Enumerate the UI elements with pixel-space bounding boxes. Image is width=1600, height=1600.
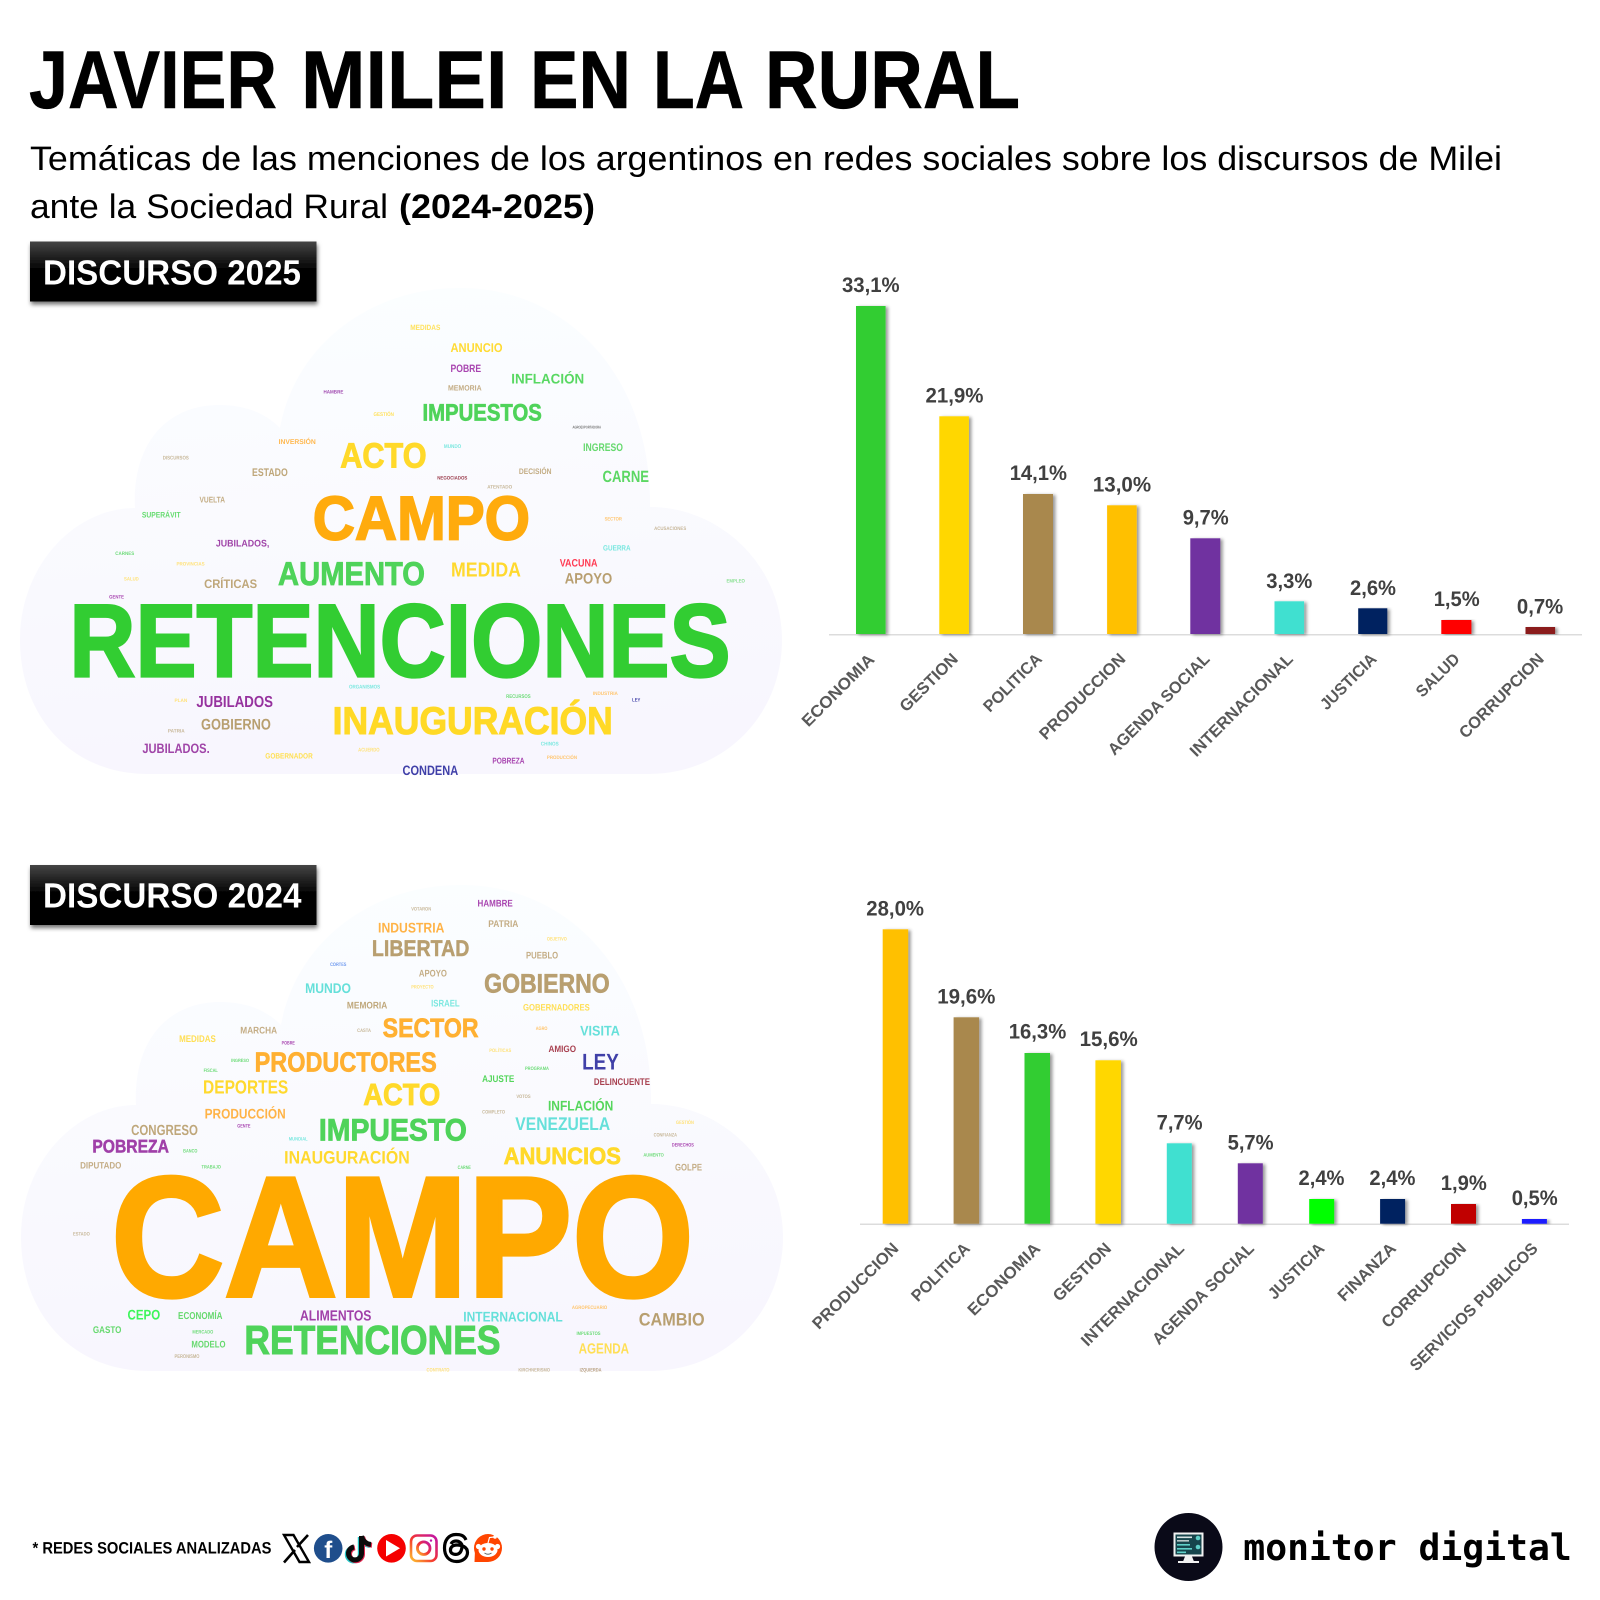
panel: word cloud 2025: JUBILADOS,	[216, 538, 269, 549]
title: RURAL	[765, 35, 1020, 126]
panel: word cloud 2024: KIRCHNERISMO	[518, 1367, 550, 1373]
panel: word cloud 2024: PERONISMO	[174, 1354, 199, 1359]
panel: word cloud 2025: MUNDO	[444, 444, 461, 449]
panel: word cloud 2025: GENTE	[109, 594, 124, 600]
panel: word cloud 2025: DECISIÓN	[519, 467, 552, 476]
bar: FINANZA 2,4%: FINANZA	[1334, 1240, 1400, 1305]
bar: SERVICIOS PUBLICOS 0,5%: 0,5%	[1512, 1187, 1558, 1210]
panel: word cloud 2024: COMPLETO	[482, 1109, 505, 1115]
bar: PRODUCCION 13,0%	[1036, 473, 1151, 743]
panel: word cloud 2025: CONDENA	[403, 763, 458, 778]
panel: word cloud 2025: VACUNA	[560, 557, 597, 569]
bar: PRODUCCION 28,0%: 28,0%	[866, 897, 924, 920]
panel: word cloud 2024: POBRE	[282, 1040, 295, 1046]
logo: monitor digital	[1154, 1513, 1572, 1581]
bar chart: temáticas 2024	[809, 897, 1569, 1375]
icon: monitor	[1154, 1513, 1222, 1581]
panel: word cloud 2025: INDUSTRIA	[593, 691, 618, 696]
panel: word cloud 2024: ACTO	[363, 1078, 440, 1112]
panel: word cloud 2024: GASTO	[93, 1325, 121, 1335]
bar: ECONOMIA 33,1%: ECONOMIA	[798, 651, 878, 731]
panel: word cloud 2025: CRÍTICAS	[204, 577, 257, 591]
icon: Facebook: f	[324, 1537, 333, 1564]
icon: X	[284, 1535, 309, 1562]
icon row: social networks	[284, 1534, 502, 1564]
bar: ECONOMIA 33,1%: 33,1%	[842, 274, 900, 297]
panel: word cloud 2025: GESTIÓN	[373, 411, 394, 417]
bar: PRODUCCION 28,0%	[809, 897, 924, 1333]
panel: word cloud 2025: NEGOCIADOS	[437, 475, 467, 481]
bar: POLITICA 19,6%: POLITICA	[908, 1240, 974, 1305]
panel: word cloud 2024: DEPORTES	[203, 1076, 288, 1098]
panel: word cloud 2024: HAMBRE	[478, 898, 513, 909]
panel: word cloud 2025: SECTOR	[605, 516, 622, 522]
panel: word cloud 2025: HAMBRE	[323, 389, 343, 395]
bar: AGENDA SOCIAL 9,7%: AGENDA SOCIAL	[1105, 650, 1214, 759]
panel: word cloud 2024: POBREZA	[92, 1136, 169, 1157]
panel: word cloud 2025: AUMENTO	[278, 555, 425, 592]
badge: discurso 2024: DISCURSO 2024	[43, 877, 302, 916]
bar: GESTION 15,6%: 15,6%	[1080, 1028, 1138, 1051]
logo: monitor digital: monitor digital	[1243, 1526, 1572, 1569]
panel: word cloud 2024: VENEZUELA	[515, 1113, 610, 1134]
word: CAMPO: CAMPO	[111, 1141, 694, 1332]
bar: INTERNACIONAL 3,3%: 3,3%	[1266, 570, 1313, 593]
panel: word cloud 2024: GENTE	[237, 1123, 251, 1129]
panel: word cloud 2025: PROVINCIAS	[177, 561, 205, 567]
panel: word cloud 2024: CORTES	[330, 962, 346, 967]
panel: word cloud 2025: INFLACIÓN	[511, 371, 584, 387]
bar: AGENDA SOCIAL 9,7%: 9,7%	[1183, 507, 1229, 530]
panel: word cloud 2024: INGRESO	[231, 1058, 249, 1063]
panel: word cloud 2024: VOTARON	[411, 906, 431, 912]
panel: word cloud 2024	[21, 885, 783, 1373]
bar: POLITICA 14,1%: POLITICA	[980, 650, 1046, 716]
panel: word cloud 2025: MEDIDA	[451, 558, 521, 581]
badge: discurso 2025	[30, 242, 316, 302]
panel: word cloud 2025: JUBILADOS	[196, 693, 273, 711]
bar chart: temáticas 2025	[798, 274, 1582, 760]
panel: word cloud 2024: ECONOMÍA	[178, 1310, 222, 1321]
panel: word cloud 2024: CEPO	[128, 1307, 160, 1322]
bar: AGENDA SOCIAL 5,7%: AGENDA SOCIAL	[1149, 1240, 1258, 1348]
panel: word cloud 2024: ALIMENTOS	[300, 1308, 371, 1324]
panel: word cloud 2024: MEDIDAS	[179, 1034, 216, 1044]
bar: PRODUCCION 28,0%: PRODUCCION	[809, 1240, 902, 1333]
bar: INTERNACIONAL 7,7%: INTERNACIONAL	[1078, 1240, 1188, 1350]
bar: INTERNACIONAL 3,3%: INTERNACIONAL	[1186, 650, 1297, 760]
panel: word cloud 2024: TRABAJO	[202, 1164, 221, 1170]
bar: FINANZA 2,4%	[1334, 1167, 1416, 1305]
panel: word cloud 2025: ANUNCIO	[451, 341, 503, 355]
subtitle	[30, 140, 1502, 226]
panel: word cloud 2025: INVERSIÓN	[279, 438, 316, 446]
title: MILEI	[301, 35, 508, 126]
bar: JUSTICIA 2,4%: 2,4%	[1298, 1167, 1345, 1190]
bar: SALUD 1,5%: SALUD	[1413, 650, 1464, 701]
bar: JUSTICIA 2,4%	[1265, 1167, 1345, 1303]
panel: word cloud 2024: PUEBLO	[526, 950, 558, 961]
panel: word cloud 2024: LIBERTAD	[372, 936, 469, 961]
panel: word cloud 2024: AGROPECUARIO	[572, 1305, 607, 1310]
icon: TikTok	[347, 1536, 372, 1561]
panel: word cloud 2024: MEMORIA	[347, 1000, 387, 1011]
bar: ECONOMIA 33,1%	[798, 274, 900, 731]
subtitle: ante la Sociedad Rural	[30, 188, 388, 226]
panel: word cloud 2024: DELINCUENTE	[594, 1077, 650, 1087]
panel: word cloud 2024: POLÍTICAS	[489, 1047, 511, 1053]
panel: word cloud 2025: MEDIDAS	[410, 323, 440, 332]
bar: CORRUPCION 1,9%	[1378, 1172, 1487, 1332]
panel: word cloud 2024: VOTOS	[516, 1094, 531, 1099]
icon: Reddit	[474, 1534, 502, 1562]
icon: YouTube	[377, 1534, 406, 1563]
panel: word cloud 2024: LEY	[582, 1049, 619, 1075]
panel: word cloud 2024: MERCADO	[192, 1329, 213, 1335]
panel: word cloud 2025: CARNE	[603, 468, 649, 486]
footer note: redes sociales: * REDES SOCIALES ANALIZADAS	[32, 1540, 272, 1558]
panel: word cloud 2024: AMIGO	[548, 1044, 576, 1054]
panel: word cloud 2024: APOYO	[419, 968, 447, 979]
panel: word cloud 2025: CHINOS	[541, 741, 559, 747]
panel: word cloud 2025: GUERRA	[603, 543, 631, 552]
bar: ECONOMIA 16,3%	[964, 1021, 1067, 1320]
panel: word cloud 2025: ACUSACIONES	[654, 526, 686, 531]
panel: word cloud 2025: SALUD	[124, 576, 139, 582]
panel: word cloud 2025: ESTADO	[252, 466, 288, 478]
panel: word cloud 2025: JUBILADOS.	[142, 741, 210, 756]
panel: word cloud 2025: AGROEXPORTADORA	[572, 425, 601, 429]
bar: SALUD 1,5%	[1413, 588, 1480, 701]
panel: word cloud 2024: CAMBIO	[639, 1309, 705, 1329]
panel: word cloud 2025: PLAN	[174, 698, 187, 703]
bar: AGENDA SOCIAL 5,7%: 5,7%	[1228, 1131, 1274, 1154]
panel: word cloud 2025: ORGANISMOS	[349, 684, 380, 690]
word: RETENCIONES: RETENCIONES	[69, 583, 731, 699]
panel: word cloud 2024: PROGRAMA	[525, 1066, 549, 1071]
panel: word cloud 2025: ATENTADO	[487, 484, 512, 490]
panel: word cloud 2025: POBRE	[451, 362, 481, 374]
panel: word cloud 2024: ESTADO	[73, 1231, 90, 1237]
bar: AGENDA SOCIAL 9,7%	[1105, 507, 1229, 759]
panel: word cloud 2025: ACUERDO	[358, 747, 380, 753]
panel: word cloud 2024: GESTIÓN	[676, 1119, 694, 1125]
bar: FINANZA 2,4%: 2,4%	[1369, 1167, 1416, 1190]
bar: CORRUPCION 0,7%	[1456, 595, 1564, 742]
bar: POLITICA 14,1%	[980, 462, 1067, 716]
subtitle: Temáticas de las menciones de los argentinos en redes sociales sobre los discursos de Milei	[30, 140, 1502, 178]
panel: word cloud 2025: MEMORIA	[448, 384, 482, 392]
panel: word cloud 2024: AUMENTO	[643, 1152, 664, 1158]
subtitle: (2024-2025)	[399, 188, 595, 226]
panel: word cloud 2025: ACTO	[340, 436, 427, 475]
bar: SALUD 1,5%: 1,5%	[1434, 588, 1480, 611]
bar: CORRUPCION 1,9%: CORRUPCION	[1378, 1240, 1470, 1332]
panel: word cloud 2025: INGRESO	[583, 441, 623, 453]
bar: JUSTICIA 2,6%: JUSTICIA	[1317, 650, 1380, 714]
bar: GESTION 21,9%: GESTION	[896, 650, 962, 716]
bar: GESTION 15,6%: GESTION	[1050, 1240, 1115, 1305]
bar: GESTION 21,9%	[896, 385, 984, 716]
panel: word cloud 2024: CONFIANZA	[654, 1132, 677, 1138]
bar: SERVICIOS PUBLICOS 0,5%	[1407, 1187, 1558, 1375]
bar: JUSTICIA 2,6%	[1317, 577, 1396, 714]
panel: word cloud 2025: PATRIA	[168, 728, 185, 734]
word: INAUGURACIÓN: INAUGURACIÓN	[333, 699, 613, 742]
panel: word cloud 2024: BANCO	[183, 1148, 198, 1154]
panel: word cloud 2025: PRODUCCIÓN	[547, 754, 577, 760]
panel: word cloud 2024: CONGRESO	[131, 1122, 198, 1138]
panel: word cloud 2024: ISRAEL	[431, 998, 460, 1009]
panel: word cloud 2025: APOYO	[565, 570, 612, 587]
panel: word cloud 2024: INDUSTRIA	[378, 920, 444, 935]
panel: word cloud 2024: GOBERNADORES	[523, 1002, 590, 1012]
panel: word cloud 2024: IMPUESTO	[319, 1113, 467, 1147]
bar: ECONOMIA 16,3%: ECONOMIA	[964, 1240, 1044, 1320]
panel: word cloud 2025: GOBERNADOR	[265, 752, 313, 760]
bar: AGENDA SOCIAL 5,7%	[1149, 1131, 1274, 1348]
panel: word cloud 2024: INTERNACIONAL	[463, 1309, 563, 1324]
panel: word cloud 2024: MUNDO	[305, 980, 351, 996]
bar: PRODUCCION 13,0%: PRODUCCION	[1036, 650, 1129, 743]
bar: JUSTICIA 2,6%: 2,6%	[1350, 577, 1396, 600]
bar: INTERNACIONAL 3,3%	[1186, 570, 1313, 760]
bar: CORRUPCION 1,9%: 1,9%	[1441, 1172, 1487, 1195]
panel: word cloud 2024: ANUNCIOS	[504, 1143, 621, 1169]
badge: discurso 2025: DISCURSO 2025	[43, 254, 301, 292]
panel: word cloud 2025: VUELTA	[199, 495, 225, 505]
bar: JUSTICIA 2,4%: JUSTICIA	[1265, 1240, 1328, 1303]
panel: word cloud 2025: LEY	[632, 697, 640, 703]
panel: word cloud 2025: RECURSOS	[506, 694, 531, 699]
panel: word cloud 2024: PATRIA	[488, 919, 518, 929]
panel: word cloud 2024: IMPUESTOS	[577, 1331, 601, 1336]
panel: word cloud 2024: GOBIERNO	[484, 969, 610, 998]
bar: POLITICA 19,6%: 19,6%	[937, 985, 996, 1008]
bar: ECONOMIA 16,3%: 16,3%	[1009, 1021, 1067, 1044]
panel: word cloud 2024: MODELO	[191, 1339, 226, 1350]
panel: word cloud 2024: CASTA	[357, 1028, 371, 1033]
bar: POLITICA 14,1%: 14,1%	[1010, 462, 1067, 485]
badge: discurso 2024	[30, 865, 316, 925]
panel: word cloud 2024: INFLACIÓN	[548, 1098, 613, 1114]
panel: word cloud 2025	[20, 288, 782, 778]
panel: word cloud 2024: VISITA	[580, 1023, 620, 1038]
title: EN	[530, 35, 631, 126]
panel: word cloud 2024: CARNE	[458, 1165, 471, 1170]
panel: word cloud 2024: MARCHA	[240, 1025, 277, 1036]
icon: Instagram	[411, 1536, 436, 1561]
panel: word cloud 2024: AGENDA	[579, 1340, 629, 1357]
word: RETENCIONES: RETENCIONES	[244, 1317, 501, 1363]
bar: GESTION 21,9%: 21,9%	[926, 385, 984, 408]
panel: word cloud 2025: GOBIERNO	[201, 715, 271, 733]
bar: POLITICA 19,6%	[908, 985, 996, 1305]
panel: word cloud 2024: INAUGURACIÓN	[284, 1148, 410, 1168]
panel: word cloud 2024: PRODUCCIÓN	[205, 1106, 286, 1121]
title: LA	[653, 35, 744, 126]
panel: word cloud 2024: AJUSTE	[482, 1074, 514, 1084]
panel: word cloud 2025: IMPUESTOS	[422, 400, 542, 426]
panel: word cloud 2024: AGRO	[536, 1026, 548, 1031]
panel: word cloud 2025: POBREZA	[492, 756, 524, 766]
panel: word cloud 2025: CARNES	[115, 551, 134, 556]
bar: CORRUPCION 0,7%: 0,7%	[1517, 595, 1564, 618]
panel: word cloud 2024: OBJETIVO	[547, 936, 567, 942]
bar: INTERNACIONAL 7,7%: 7,7%	[1157, 1111, 1203, 1134]
bar: PRODUCCION 13,0%: 13,0%	[1093, 473, 1151, 496]
panel: word cloud 2025: SUPERÁVIT	[142, 510, 181, 520]
panel: word cloud 2024: DIPUTADO	[80, 1160, 121, 1170]
icon: Threads	[444, 1534, 468, 1562]
bar: INTERNACIONAL 7,7%	[1078, 1111, 1203, 1350]
panel: word cloud 2024: PRODUCTORES	[255, 1047, 437, 1078]
panel: word cloud 2025: EMPLEO	[727, 578, 745, 584]
title	[29, 35, 1020, 126]
panel: word cloud 2024: SECTOR	[383, 1013, 479, 1043]
panel: word cloud 2024: IZQUIERDA	[580, 1367, 602, 1373]
bar: GESTION 15,6%	[1050, 1028, 1138, 1305]
bar: SERVICIOS PUBLICOS 0,5%: SERVICIOS PUBLICOS	[1407, 1240, 1542, 1375]
panel: word cloud 2024: CONTRATO	[427, 1367, 450, 1373]
panel: word cloud 2024: PROYECTO	[411, 984, 434, 990]
icon: Facebook	[314, 1534, 343, 1564]
panel: word cloud 2024: FISCAL	[204, 1068, 218, 1073]
panel: word cloud 2024: DERECHOS	[672, 1142, 694, 1148]
panel: word cloud 2024: GOLPE	[675, 1162, 702, 1173]
panel: word cloud 2025: DISCURSOS	[163, 455, 189, 461]
word: CAMPO: CAMPO	[313, 484, 530, 553]
title: JAVIER	[29, 35, 277, 126]
bar: CORRUPCION 0,7%: CORRUPCION	[1456, 650, 1548, 742]
panel: word cloud 2024: MUNDIAL	[289, 1136, 308, 1142]
